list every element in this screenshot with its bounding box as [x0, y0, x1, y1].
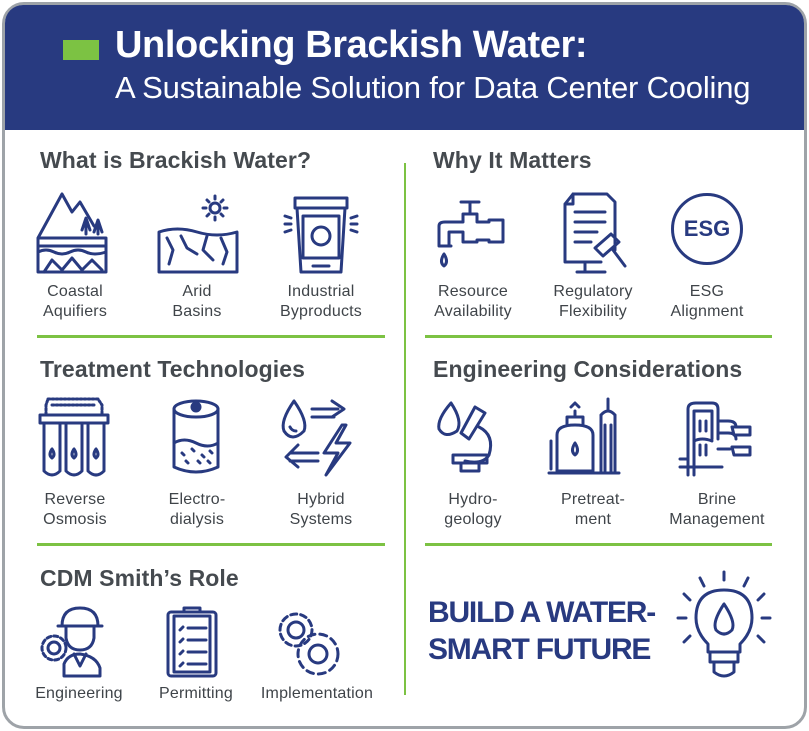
icon: arid basin — [158, 194, 238, 274]
label — [670, 283, 744, 320]
icon: brine management — [678, 402, 752, 476]
label — [444, 491, 502, 528]
label: Brine — [698, 491, 736, 508]
icon: industrial byproducts — [284, 196, 358, 274]
label: Aquifiers — [43, 303, 107, 320]
icon: electrodialysis — [172, 400, 220, 474]
label: Flexibility — [559, 303, 627, 320]
icon: ESG circle: ESG — [684, 216, 730, 241]
label: Byproducts — [280, 303, 362, 320]
heading: Engineering Considerations — [433, 356, 742, 382]
subtitle: A Sustainable Solution for Data Center Cooling — [115, 70, 750, 105]
section: CDM Smith's role — [35, 565, 373, 702]
callout: build a water-smart future — [428, 596, 656, 666]
label: Reverse — [44, 491, 105, 508]
section: treatment technologies — [38, 356, 352, 528]
label — [290, 491, 352, 528]
icon: gears — [278, 612, 340, 676]
label: Arid — [182, 283, 212, 300]
label: Availability — [434, 303, 512, 320]
label — [561, 491, 625, 528]
header banner — [5, 5, 804, 130]
vertical divider — [404, 163, 406, 695]
callout: build a water-smart future: SMART FUTURE — [428, 633, 650, 666]
label: Management — [669, 511, 765, 528]
label: Engineering — [35, 685, 123, 702]
label: Implementation — [261, 685, 373, 702]
icon: faucet — [438, 200, 504, 268]
label — [172, 283, 222, 320]
green accent square — [63, 40, 99, 60]
label: geology — [444, 511, 502, 528]
label: Basins — [172, 303, 222, 320]
icon: hydrogeology microscope — [437, 401, 492, 472]
section: what is brackish water — [36, 147, 362, 320]
section: engineering considerations — [433, 356, 765, 528]
heading: Why It Matters — [433, 147, 592, 173]
label: Electro- — [169, 491, 225, 508]
label: dialysis — [170, 511, 224, 528]
label — [280, 283, 362, 320]
label: Systems — [290, 511, 352, 528]
icon: pretreatment — [548, 398, 620, 474]
label: Resource — [438, 283, 508, 300]
label — [669, 491, 765, 528]
title: Unlocking Brackish Water: — [115, 24, 587, 66]
icon: lightbulb — [676, 570, 772, 678]
label: Regulatory — [553, 283, 633, 300]
label: Pretreat- — [561, 491, 625, 508]
icon: coastal aquifer — [36, 192, 108, 274]
icon: hybrid systems — [282, 399, 352, 476]
label: Industrial — [288, 283, 354, 300]
icon: regulatory document — [564, 192, 627, 274]
heading: What is Brackish Water? — [40, 147, 311, 173]
label: ment — [575, 511, 611, 528]
label — [553, 283, 633, 320]
label: Alignment — [671, 303, 743, 320]
heading: CDM Smith’s Role — [40, 565, 239, 591]
label: Coastal — [47, 283, 103, 300]
label — [43, 283, 107, 320]
icon: clipboard — [166, 606, 218, 678]
icon: engineer — [40, 606, 104, 678]
label — [169, 491, 225, 528]
label — [43, 491, 107, 528]
heading: Treatment Technologies — [40, 356, 305, 382]
label — [434, 283, 512, 320]
icon: ESG circle — [671, 193, 743, 265]
icon: reverse osmosis — [38, 398, 110, 477]
label: Hydro- — [448, 491, 498, 508]
label: Osmosis — [43, 511, 107, 528]
label: Permitting — [159, 685, 233, 702]
section: why it matters — [433, 147, 744, 320]
label: Hybrid — [297, 491, 345, 508]
label: ESG — [690, 283, 724, 300]
callout: build a water-smart future: BUILD A WATER- — [428, 596, 655, 629]
